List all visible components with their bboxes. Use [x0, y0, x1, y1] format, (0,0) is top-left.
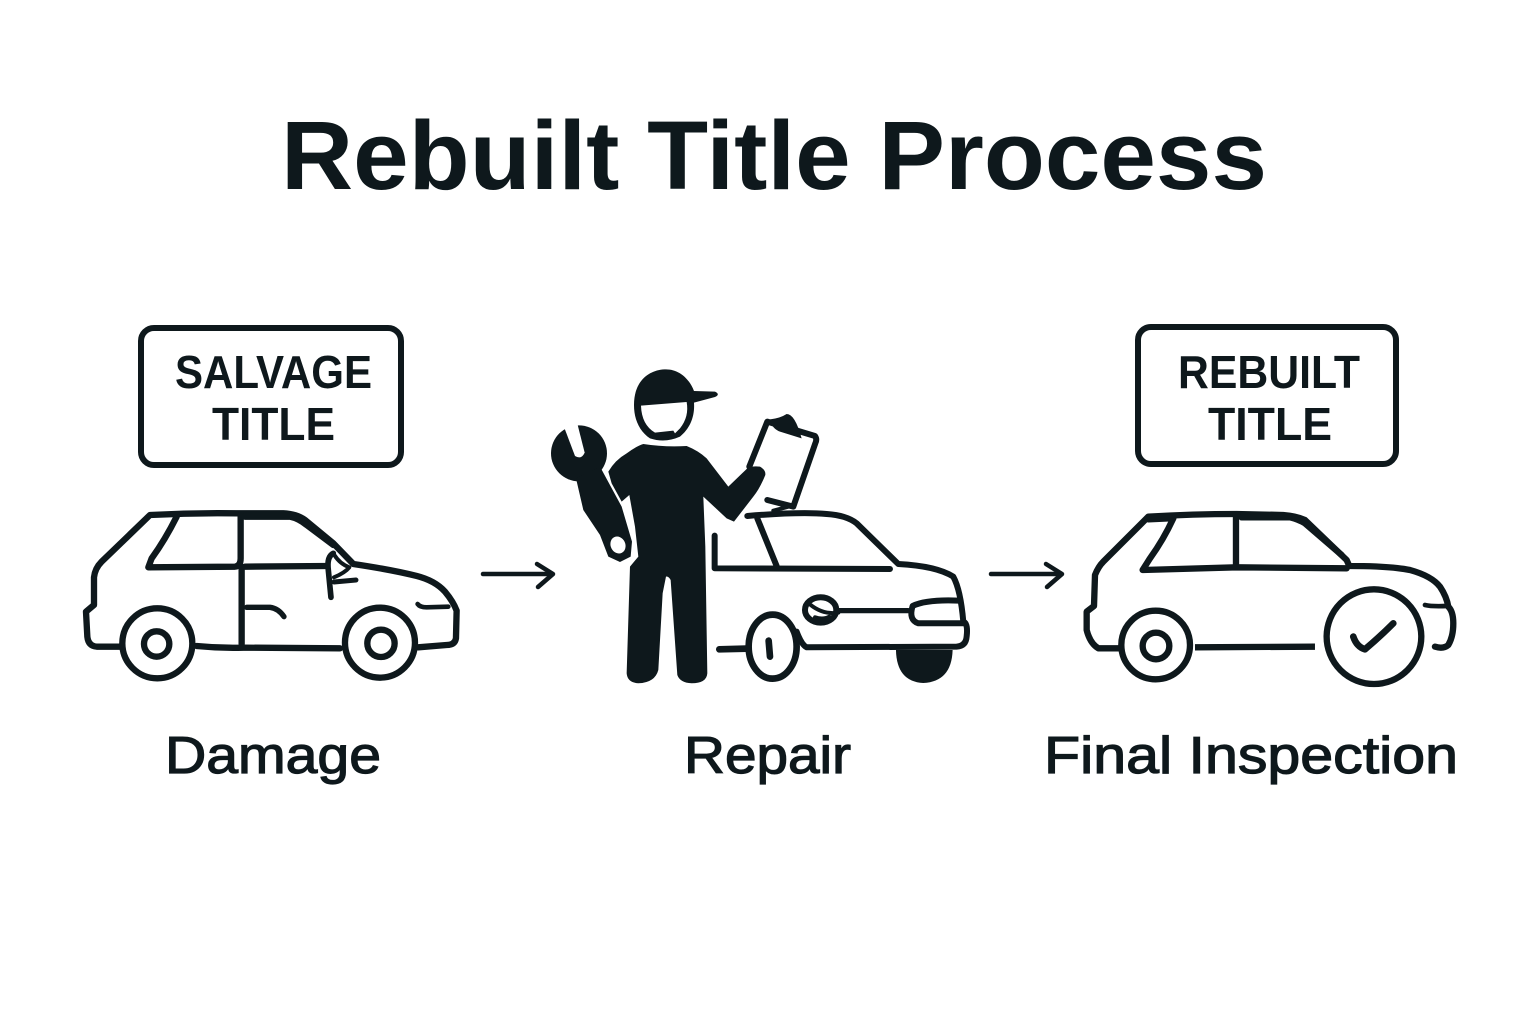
icon: check mark	[1353, 623, 1393, 649]
icon: clipboard	[749, 414, 816, 511]
step 2: repair	[551, 369, 967, 785]
step 1: damage	[86, 328, 457, 785]
title: Rebuilt Title Process	[281, 101, 1267, 210]
sign: rebuilt title: TITLE	[1208, 398, 1332, 450]
icon: mechanic with wrench and clipboard by a car	[551, 369, 967, 683]
sign: rebuilt title	[1138, 327, 1396, 464]
sign: salvage title	[141, 328, 401, 465]
icon: inspected car with check mark	[1087, 514, 1453, 684]
arrow: repair to final inspection	[991, 564, 1062, 587]
sign: rebuilt title: REBUILT	[1178, 346, 1360, 398]
label: damage: Damage	[165, 727, 381, 785]
arrow: damage to repair	[483, 564, 553, 587]
step 3: final inspection	[1044, 327, 1458, 785]
icon: car under repair	[715, 513, 967, 683]
icon: wrench	[551, 418, 632, 562]
label: final inspection: Final Inspection	[1044, 727, 1458, 785]
sign: salvage title: TITLE	[212, 398, 335, 450]
icon: damaged car	[86, 513, 457, 678]
icon: mechanic figure	[608, 369, 765, 683]
sign: salvage title: SALVAGE	[175, 346, 372, 398]
label: repair: Repair	[684, 727, 851, 785]
